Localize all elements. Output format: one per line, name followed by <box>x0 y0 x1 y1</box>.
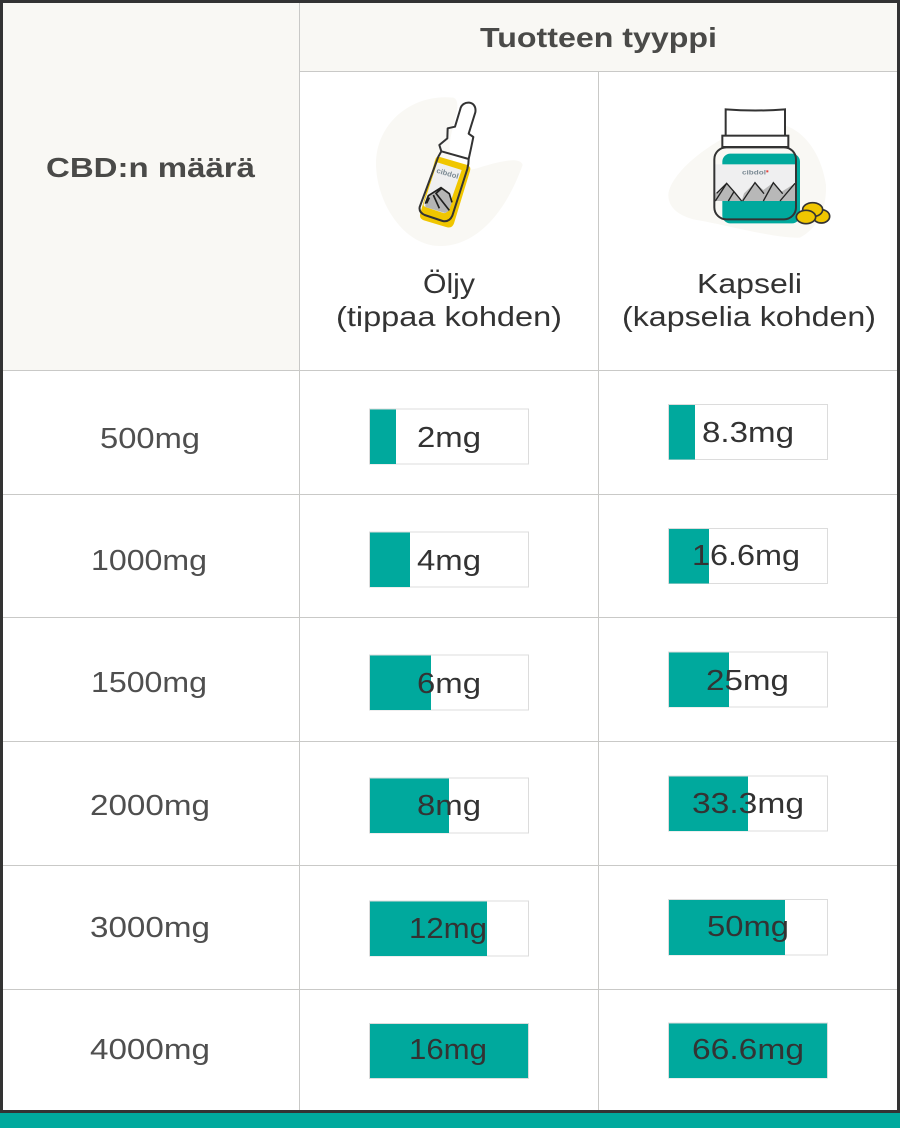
header cell: CBD amount <box>3 3 299 370</box>
row labels: CBD amount: 500mg <box>100 423 200 455</box>
row labels: CBD amount: 4000mg <box>90 1034 210 1066</box>
heading: product type: Tuotteen tyyppi <box>480 22 717 53</box>
row labels: CBD amount <box>90 423 210 1066</box>
icon: oil bottle <box>376 97 523 246</box>
label: capsule per capsule: (kapselia kohden) <box>622 301 876 332</box>
label: oil per drop <box>336 268 562 332</box>
icon: oil bottle: cibdol <box>435 166 460 181</box>
bar: oil 2000mg: 8mg <box>417 790 481 822</box>
footer teal band <box>0 1113 900 1128</box>
bar: oil 4000mg <box>370 1024 528 1078</box>
bars: oil column <box>370 409 528 1078</box>
bar: oil 1500mg <box>370 655 528 710</box>
bar: oil 3000mg <box>370 901 528 956</box>
row labels: CBD amount: 1000mg <box>91 545 207 577</box>
bar: capsule 1000mg <box>668 528 828 584</box>
bar: capsule 3000mg: 50mg <box>707 911 789 943</box>
bars: capsule column <box>668 404 828 1078</box>
bar: capsule 4000mg: 66.6mg <box>692 1034 804 1066</box>
bar: oil 1000mg <box>370 532 528 587</box>
label: capsule per capsule <box>622 268 876 332</box>
bar: oil 3000mg: 12mg <box>409 913 487 945</box>
row labels: CBD amount: 3000mg <box>90 912 210 944</box>
icon: capsule jar <box>668 109 830 238</box>
bar: capsule 3000mg <box>668 900 828 955</box>
bar: oil 500mg <box>370 409 528 464</box>
bar: capsule 2000mg <box>668 776 828 831</box>
bar: capsule 1500mg: 25mg <box>706 665 789 697</box>
label: oil per drop: Öljy <box>423 268 475 299</box>
bar: capsule 1000mg: 16.6mg <box>692 540 800 572</box>
bar: oil 4000mg: 16mg <box>409 1034 487 1066</box>
bar: capsule 500mg: 8.3mg <box>702 417 794 449</box>
bar: oil 1500mg: 6mg <box>417 668 481 700</box>
bar: capsule 1500mg <box>668 652 828 707</box>
row labels: CBD amount: 2000mg <box>90 790 210 822</box>
row labels: CBD amount: 1500mg <box>91 667 207 699</box>
bar: oil 2000mg <box>370 778 528 833</box>
heading: CBD amount: CBD:n määrä <box>46 152 255 183</box>
bar: capsule 4000mg <box>668 1023 828 1078</box>
bar: oil 1000mg: 4mg <box>417 545 481 577</box>
bar: oil 500mg: 2mg <box>417 422 481 454</box>
bar: capsule 2000mg: 33.3mg <box>692 788 804 820</box>
header cell: product type <box>299 3 897 71</box>
bar: capsule 500mg <box>668 404 828 460</box>
label: oil per drop: (tippaa kohden) <box>336 301 562 332</box>
icon: capsule jar: cibdol <box>742 169 766 176</box>
label: capsule per capsule: Kapseli <box>697 268 802 299</box>
